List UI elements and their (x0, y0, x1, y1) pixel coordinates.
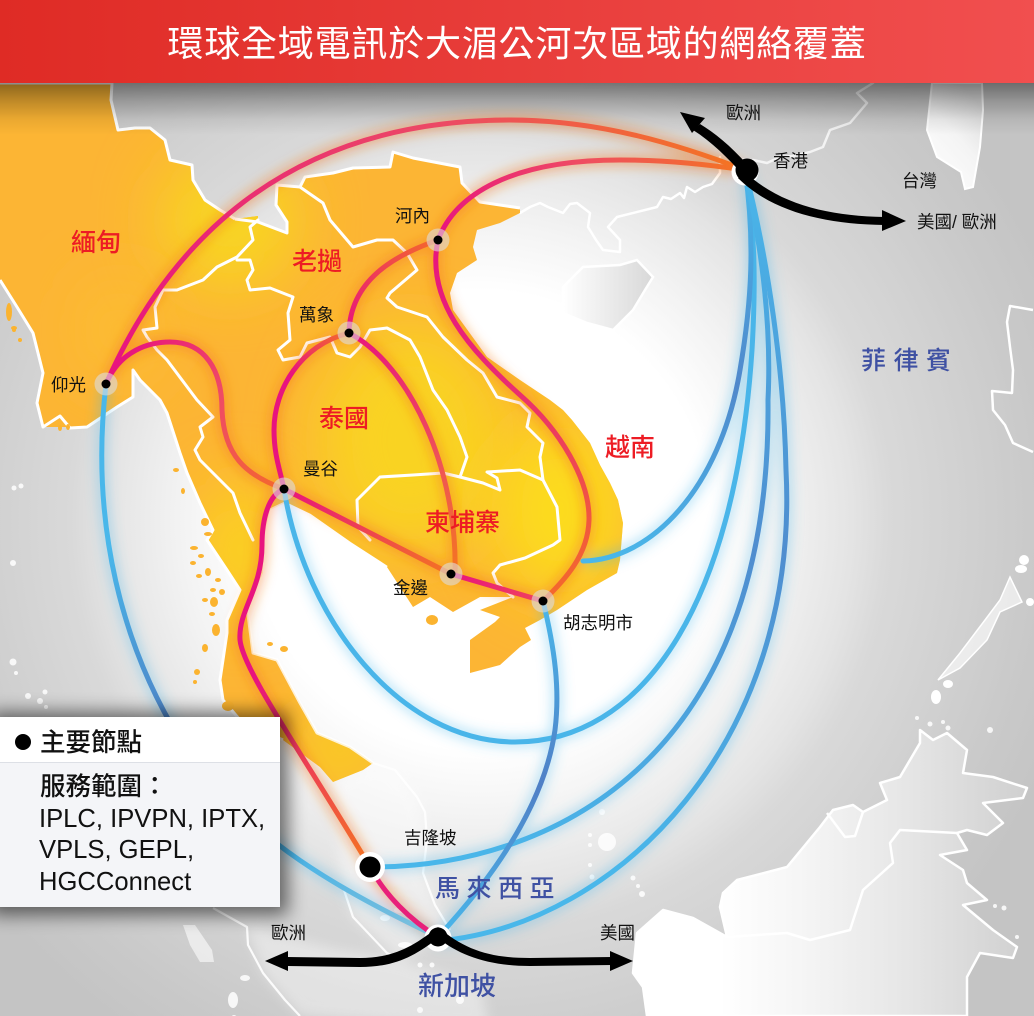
blue network routes (102, 170, 787, 941)
country label: malaysia: 馬來西亞 (435, 875, 561, 903)
legend dot (15, 734, 31, 750)
title banner: 環球全域電訊於大湄公河次區域的網絡覆蓋 (167, 23, 867, 64)
warm network routes (106, 120, 745, 937)
legend services list: IPLC, IPVPN, IPTX, (39, 805, 265, 833)
taiwan island (927, 83, 983, 189)
label: usa and europe: 美國/ 歐洲 (917, 212, 997, 232)
legend services list (39, 805, 265, 896)
route: kuala lumpur to hong kong (370, 170, 769, 867)
orange offshore islands (6, 303, 438, 711)
route: vietnam to hong kong (583, 170, 751, 561)
country label: cambodia: 柬埔寨 (425, 509, 500, 537)
label: taiwan: 台灣 (902, 171, 937, 191)
route: ho chi minh to singapore (438, 601, 557, 937)
legend title: 主要節點 (40, 729, 142, 757)
label: europe north: 歐洲 (726, 103, 761, 123)
borneo (633, 730, 1027, 1016)
label: hong kong: 香港 (773, 151, 808, 171)
legend services heading: 服務範圍： (40, 773, 168, 801)
label: bangkok: 曼谷 (303, 459, 338, 479)
label: singapore: 新加坡 (418, 971, 496, 1001)
label: ho chi minh city: 胡志明市 (563, 613, 633, 633)
route: bangkok to kuala lumpur (240, 489, 370, 867)
top shadow under header (0, 83, 1034, 135)
route: singapore to hong kong (438, 170, 787, 941)
title banner (0, 0, 1034, 83)
small islands (10, 484, 1019, 1016)
legend services list: HGCConnect (39, 868, 191, 896)
route: hanoi to vientiane (349, 240, 438, 333)
palawan island (931, 555, 1034, 704)
legend services list: VPLS, GEPL, (39, 836, 194, 864)
route: kuala lumpur to singapore (370, 867, 438, 937)
indochina land mass (0, 83, 640, 803)
country label: myanmar: 緬甸 (71, 229, 121, 257)
route: bangkok to hong kong (284, 170, 754, 742)
label: usa: 美國 (600, 923, 635, 943)
legend panel (0, 712, 288, 915)
route: vientiane to bangkok (274, 333, 349, 489)
label: phnom penh: 金邊 (393, 578, 428, 598)
route: yangon to hong kong (106, 120, 745, 384)
malay peninsula and sumatra coast (213, 763, 450, 1016)
country label: vietnam: 越南 (605, 434, 655, 462)
china coastline (0, 83, 873, 252)
label: europe south: 歐洲 (271, 923, 306, 943)
route glows (102, 120, 787, 941)
label: hanoi: 河內 (395, 206, 430, 226)
route: vientiane to phnom penh (349, 333, 455, 574)
arrows: hong kong to europe and usa (680, 112, 906, 231)
route: phnom penh to ho chi minh (451, 574, 543, 601)
arrows: singapore to europe and usa (265, 927, 633, 971)
philippines coast (992, 306, 1033, 452)
country label: thailand: 泰國 (319, 405, 369, 433)
route: hanoi to ho chi minh (436, 240, 589, 601)
label: vientiane: 萬象 (299, 305, 334, 325)
label: yangon: 仰光 (51, 375, 86, 395)
country label: philippines: 菲律賓 (861, 347, 959, 375)
hub nodes (94, 158, 758, 952)
route: yangon to singapore (102, 384, 438, 937)
label: kuala lumpur: 吉隆坡 (404, 828, 456, 848)
country borders (143, 187, 560, 597)
route: bangkok to phnom penh (284, 489, 451, 574)
malay peninsula and sumatra land (247, 763, 490, 1016)
hainan island (563, 260, 653, 330)
route: yangon to bangkok (106, 342, 284, 489)
country label: laos: 老撾 (292, 248, 342, 276)
route: hanoi to hong kong (438, 160, 745, 240)
